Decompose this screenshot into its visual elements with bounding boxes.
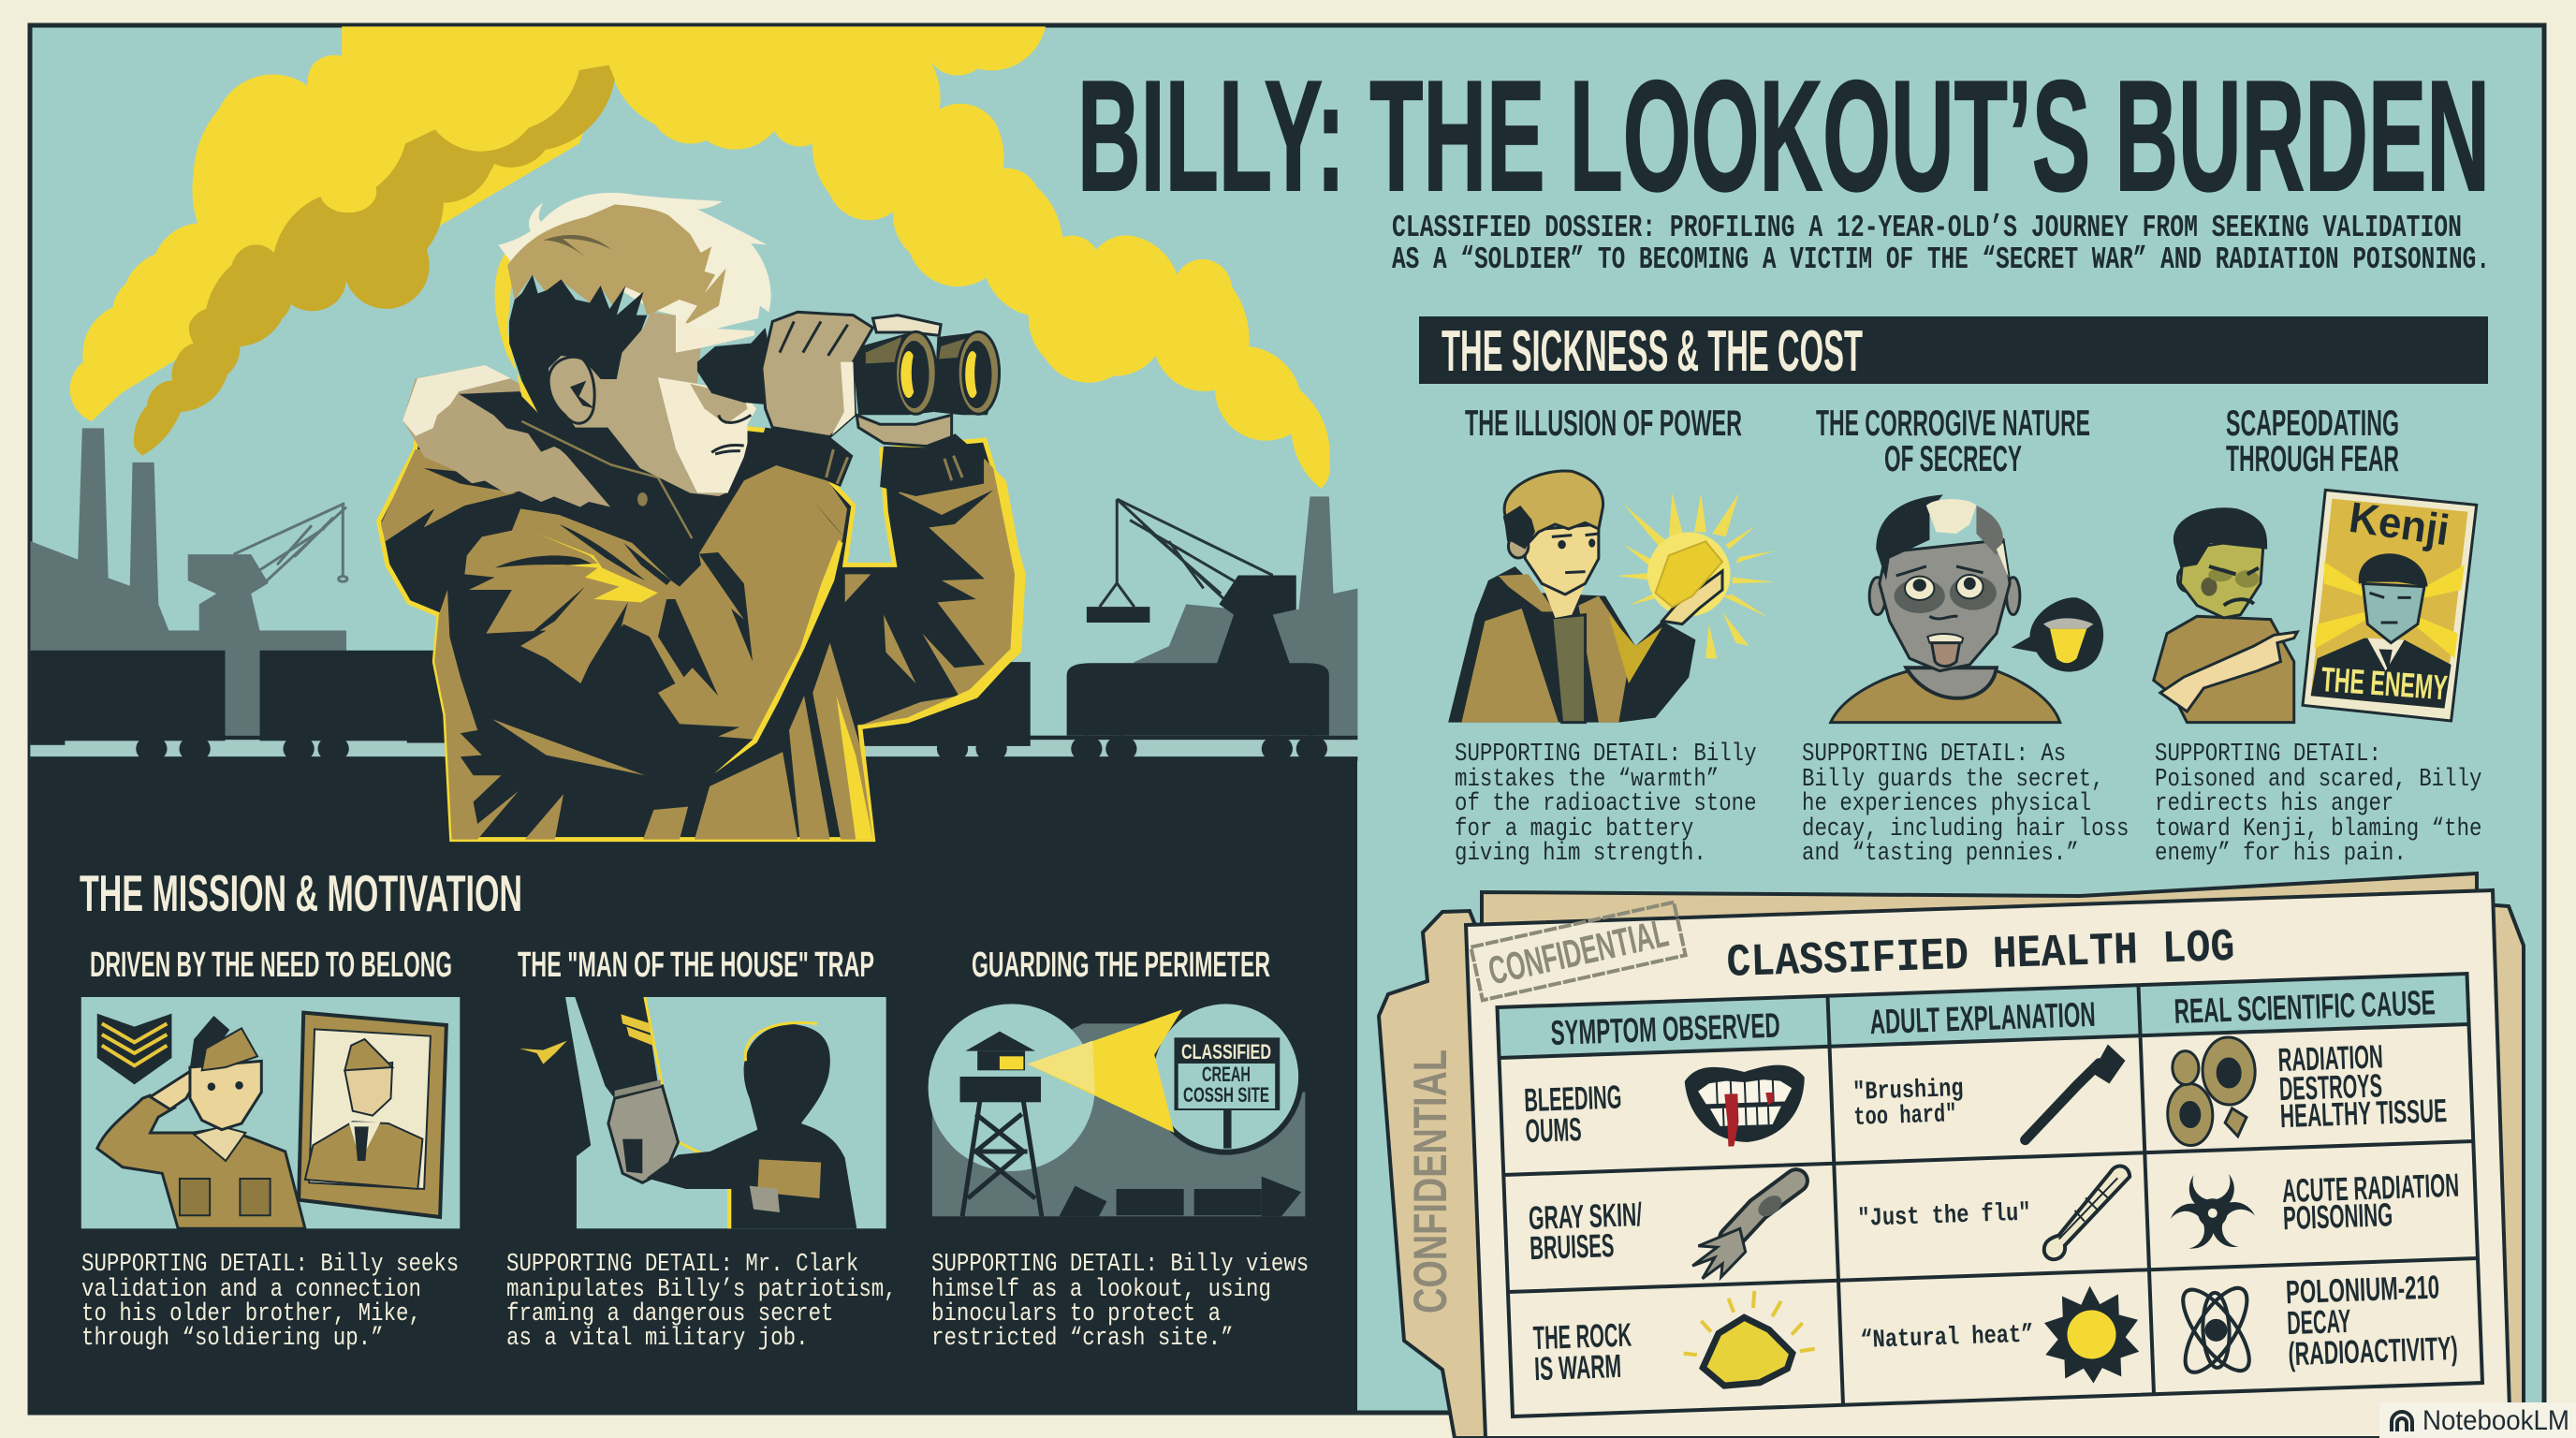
- section bar: [1419, 316, 2488, 384]
- supporting text: belonging: SUPPORTING DETAIL: Billy seeks: [81, 1250, 459, 1279]
- finger lines: [780, 321, 848, 356]
- hair highlight: [499, 193, 771, 344]
- poster name: Kenji: [2347, 492, 2452, 554]
- supporting text: illusion of power: of the radioactive stone: [1455, 789, 1757, 818]
- scientific cause column text: DECAY: [2287, 1303, 2351, 1342]
- column headings: GUARDING THE PERIMETER: [972, 946, 1270, 985]
- paper sheet: [1466, 890, 2510, 1438]
- supporting text: corrosive secrecy: he experiences physical: [1802, 789, 2091, 818]
- adult explanation column text: [1851, 1074, 2036, 1356]
- section heading: THE MISSION & MOTIVATION: [80, 864, 522, 922]
- smoke plume bright yellow: [70, 26, 1330, 489]
- glow rays: [1617, 493, 1775, 658]
- illustration: boy holding glowing stone: [1448, 471, 1775, 723]
- section heading: THE SICKNESS & THE COST: [1442, 319, 1863, 384]
- barrel far: [934, 332, 998, 415]
- symptom column text: THE ROCK: [1532, 1317, 1632, 1357]
- cuff far: [880, 433, 984, 496]
- nose and mouth lines: [711, 415, 751, 454]
- lens near: [896, 331, 936, 414]
- finger tops far hand: [872, 315, 941, 335]
- supporting text: perimeter: binoculars to protect a: [931, 1299, 1221, 1328]
- scientific cause column text: POLONIUM-210: [2285, 1269, 2440, 1311]
- icon: thermometer: [2042, 1166, 2132, 1260]
- confidential stamp: CONFIDENTIAL: [1485, 910, 1672, 993]
- scientific cause column text: DESTROYS: [2278, 1067, 2383, 1108]
- smoke plumes: [70, 26, 1330, 489]
- folder back: [1379, 911, 1591, 1438]
- column headings: THE "MAN OF THE HOUSE" TRAP: [518, 946, 874, 985]
- supporting text: perimeter: SUPPORTING DETAIL: Billy views: [931, 1250, 1309, 1279]
- coat silhouette: [379, 403, 1023, 840]
- hero: head and binoculars: [495, 193, 1000, 543]
- scientific cause column text: ACUTE RADIATION: [2281, 1167, 2460, 1210]
- icon: atom: [2171, 1278, 2261, 1383]
- column headings: DRIVEN BY THE NEED TO BELONG: [90, 946, 452, 985]
- nose shadow: [690, 384, 748, 424]
- supporting text: corrosive secrecy: and “tasting pennies.”: [1802, 839, 2079, 868]
- supporting text: scapegoating: toward Kenji, blaming “the: [2155, 814, 2481, 844]
- icon: bleeding mouth: [1684, 1064, 1807, 1148]
- supporting text: scapegoating: redirects his anger: [2155, 789, 2393, 818]
- symptom column text: BRUISES: [1530, 1227, 1615, 1267]
- train silhouette: [30, 651, 1357, 762]
- face shadow: [549, 312, 726, 496]
- column headings: [1465, 404, 2399, 479]
- health log title: CLASSIFIED HEALTH LOG: [1726, 921, 2235, 990]
- table header: SYMPTOM OBSERVED: [1550, 1005, 1780, 1052]
- collar button: [637, 492, 648, 506]
- supporting text: corrosive secrecy: decay, including hair loss: [1802, 814, 2129, 844]
- symptom column text: OUMS: [1525, 1111, 1582, 1150]
- barrel highlights: [866, 337, 966, 363]
- crane left: [234, 504, 347, 583]
- dark lower left panel: [30, 759, 1357, 1413]
- confidential stamp: [1471, 902, 1686, 1000]
- fur highlight: [402, 365, 511, 436]
- supporting text: man of the house: manipulates Billy’s patriotism,: [506, 1275, 897, 1304]
- hero: fur collar: [402, 365, 610, 507]
- panel: the mission and motivation: [80, 864, 1309, 1353]
- adult explanation column text: too hard": [1853, 1101, 1957, 1133]
- ear inner: [570, 381, 595, 409]
- scientific cause column text: RADIATION: [2277, 1038, 2383, 1078]
- illustration: sick boy with metallic taste bubble: [1831, 494, 2103, 723]
- hair rim yellow: [495, 243, 541, 417]
- watermark: NotebookLM: [2379, 1402, 2576, 1438]
- illustration: watchtower spotlighting the site: [929, 1001, 1305, 1216]
- symptom column text: GRAY SKIN/: [1528, 1196, 1643, 1237]
- hair tan: [507, 204, 726, 326]
- supporting text: man of the house: SUPPORTING DETAIL: Mr. Clark: [506, 1250, 858, 1279]
- factory skyline right: [1108, 496, 1357, 736]
- supporting text: scapegoating: SUPPORTING DETAIL:: [2155, 740, 2381, 769]
- column headings: THE CORROGIVE NATURE: [1816, 404, 2090, 444]
- folder right edge: [2471, 903, 2524, 1438]
- collar dark base: [521, 415, 754, 543]
- rail strip: [30, 738, 1357, 760]
- icon: toothbrush: [2022, 1044, 2129, 1140]
- poster caption: THE ENEMY: [2320, 660, 2449, 707]
- column headings: [90, 946, 1270, 985]
- hood interior: [459, 391, 597, 467]
- fur tan: [402, 365, 610, 507]
- hero scene: skyline and train: [30, 428, 1357, 762]
- icon: biohazard: [2156, 1161, 2269, 1260]
- coat yellow highlights: [537, 468, 1023, 840]
- icon: sun: [2043, 1284, 2140, 1385]
- lens far: [958, 331, 1000, 414]
- cuff ribs: [827, 449, 962, 484]
- cuff near: [754, 428, 853, 487]
- supporting text: scapegoating: Poisoned and scared, Billy: [2155, 765, 2482, 794]
- panel: the sickness and the cost: [1419, 316, 2488, 868]
- sign text: COSSH SITE: [1183, 1083, 1269, 1107]
- hair streak: [543, 235, 611, 257]
- scientific cause column text: (RADIOACTIVITY): [2288, 1330, 2458, 1372]
- illustration: saluting boy and brother portrait: [81, 997, 460, 1228]
- symptom column text: IS WARM: [1533, 1348, 1622, 1387]
- sign text: CREAH: [1202, 1063, 1251, 1086]
- hero: boy coat: [379, 403, 1023, 840]
- column headings: SCAPEODATING: [2226, 404, 2399, 444]
- binocular eyepiece: [697, 328, 780, 405]
- supporting text: corrosive secrecy: Billy guards the secret,: [1802, 765, 2104, 794]
- folder tab label: CONFIDENTIAL: [1404, 1049, 1456, 1313]
- supporting text: belonging: validation and a connection: [81, 1275, 421, 1304]
- hand far under barrel: [856, 415, 952, 447]
- supporting text: illusion of power: for a magic battery: [1455, 814, 1693, 844]
- cheek highlight: [658, 377, 756, 493]
- health log table: [1498, 974, 2482, 1416]
- crane cab and hanging load: [1087, 576, 1296, 665]
- column headings: THE ILLUSION OF POWER: [1465, 404, 1742, 444]
- adult explanation column text: "Brushing: [1852, 1076, 1964, 1108]
- supporting text: illusion of power: SUPPORTING DETAIL: Billy: [1455, 740, 1757, 769]
- ear: [549, 357, 594, 423]
- scientific cause column text: HEALTHY TISSUE: [2279, 1093, 2448, 1135]
- smoke plume shadow: [134, 65, 615, 456]
- scientific cause column text: POISONING: [2282, 1196, 2393, 1237]
- sign text: CLASSIFIED: [1181, 1040, 1271, 1064]
- table header: ADULT EXPLANATION: [1869, 994, 2096, 1041]
- column headings: THROUGH FEAR: [2226, 439, 2399, 479]
- symptom column text: [1524, 1078, 1648, 1387]
- sign text: [1181, 1040, 1271, 1107]
- adult explanation column text: “Natural heat”: [1860, 1322, 2034, 1356]
- hand near: [762, 312, 872, 437]
- coat dark folds: [495, 503, 845, 696]
- forehead highlight: [676, 318, 754, 353]
- panel: classified folder: [1379, 873, 2524, 1438]
- factory skyline left: [30, 428, 346, 736]
- subtitle: [1392, 211, 2490, 277]
- supporting text: belonging: through “soldiering up.”: [81, 1324, 384, 1353]
- crane right: [1100, 499, 1273, 607]
- scientific cause column text: [2276, 1036, 2466, 1372]
- table header: [1550, 982, 2436, 1052]
- hair undercut: [509, 274, 647, 417]
- icon: damaged cells: [2165, 1036, 2258, 1146]
- supporting text: illusion of power: mistakes the “warmth”: [1455, 765, 1719, 794]
- icon: gray arm: [1690, 1181, 1800, 1279]
- collar strap: [521, 421, 692, 538]
- hand highlight: [831, 362, 855, 435]
- column headings: OF SECRECY: [1884, 439, 2022, 479]
- supporting text: scapegoating: enemy” for his pain.: [2155, 839, 2407, 868]
- supporting text: perimeter: restricted “crash site.”: [931, 1324, 1234, 1353]
- coat khaki panels: [381, 449, 1023, 840]
- supporting text: man of the house: as a vital military job.: [506, 1324, 809, 1353]
- barrel near: [853, 334, 937, 415]
- illustration: angry boy and enemy poster: [2154, 490, 2477, 723]
- back sheet: [1482, 873, 2477, 929]
- icon: warm rock: [1681, 1289, 1816, 1387]
- supporting text: man of the house: framing a dangerous secret: [506, 1299, 833, 1328]
- illustration: adult hand on boy: [520, 997, 886, 1228]
- symptom column text: BLEEDING: [1524, 1079, 1622, 1119]
- supporting text: perimeter: himself as a lookout, using: [931, 1275, 1271, 1304]
- supporting text: illusion of power: giving him strength.: [1455, 839, 1706, 868]
- adult explanation column text: "Just the flu": [1857, 1200, 2031, 1234]
- supporting text: belonging: to his older brother, Mike,: [81, 1299, 421, 1328]
- supporting text: corrosive secrecy: SUPPORTING DETAIL: As: [1802, 740, 2066, 769]
